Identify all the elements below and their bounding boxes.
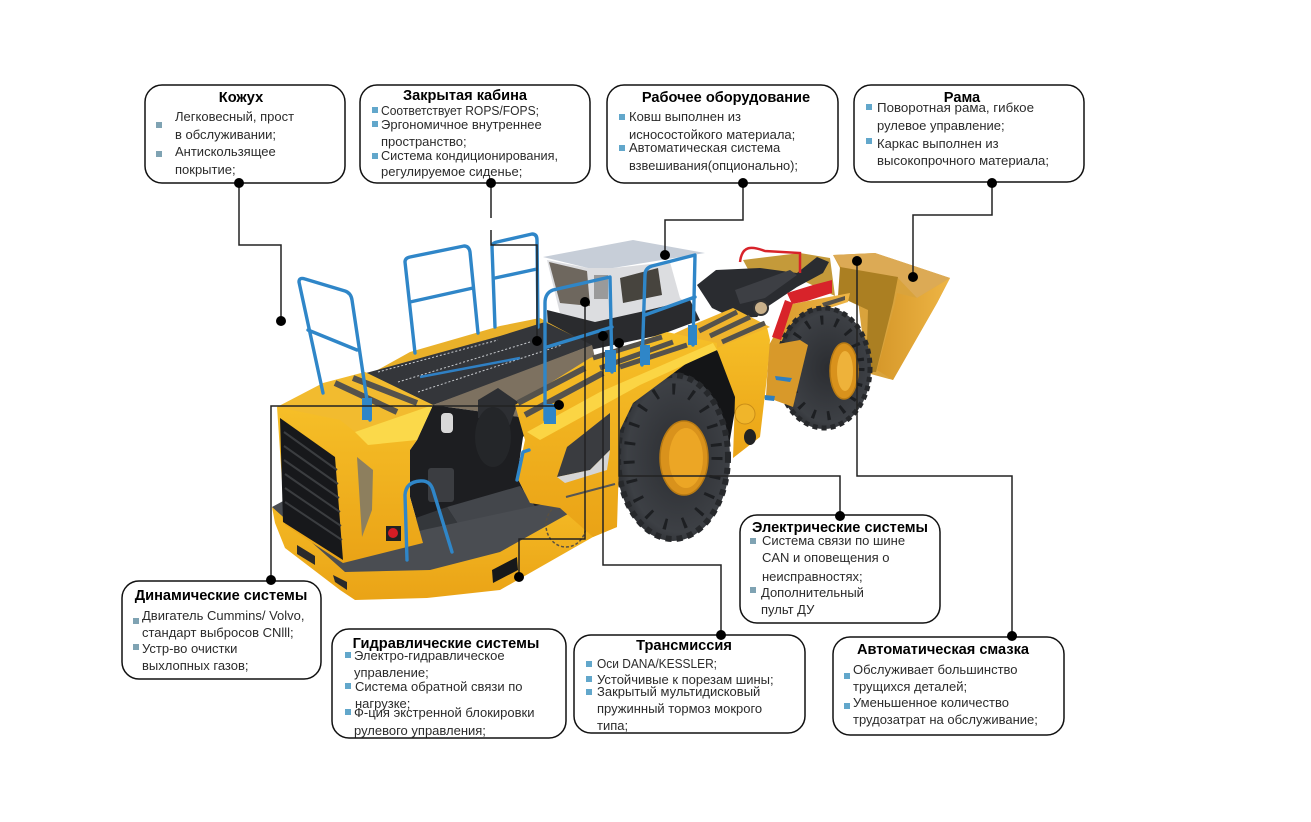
- panel: Рабочее оборудование: [607, 85, 838, 183]
- yellow lift arm back: [743, 253, 835, 296]
- dark rear deck: [366, 322, 596, 417]
- front frame lower panel: [764, 340, 808, 407]
- radiator grille: [280, 418, 343, 560]
- loader machine illustration: [272, 234, 950, 600]
- panel: Электрические системы: Электрические системы: [752, 520, 928, 536]
- cab: [543, 240, 705, 350]
- panel: Кожух: Антискользящее: [175, 144, 276, 159]
- panel: Динамические системы: Динамические системы: [135, 588, 307, 604]
- panel: Закрытая кабина: Закрытая кабина: [403, 88, 528, 104]
- panel: Трансмиссия: [574, 635, 805, 733]
- panel: Гидравлические системы: [332, 629, 566, 738]
- panel: Закрытая кабина: Система кондиционирования,: [381, 148, 558, 163]
- rear tyre: [616, 373, 730, 541]
- panel: Рама: Каркас выполнен из: [877, 136, 999, 151]
- yellow rear deck band: [365, 318, 590, 405]
- panel: Автоматическая смазка: Обслуживает большинство: [853, 662, 1018, 677]
- panel: Рама: Поворотная рама, гибкое: [877, 100, 1034, 115]
- panel: Динамические системы: выхлопных газов;: [142, 658, 248, 673]
- panel: Кожух: Легковесный, прост: [175, 109, 294, 124]
- panel: Динамические системы: Двигатель Cummins/ Volvo,: [142, 608, 304, 623]
- panel: Трансмиссия: Устойчивые к порезам шины;: [597, 672, 774, 687]
- side body panel: [515, 332, 717, 537]
- rear cowl: [277, 372, 433, 563]
- middle deck with stripes: [667, 308, 770, 348]
- panel: Рабочее оборудование: взвешивания(опционально);: [629, 158, 798, 173]
- engine bay: [410, 388, 553, 547]
- panel: Динамические системы: стандарт выбросов CNlll;: [142, 625, 294, 640]
- panel: Электрические системы: [740, 515, 940, 623]
- bucket: [833, 253, 950, 380]
- panel: Закрытая кабина: регулируемое сиденье;: [381, 164, 522, 179]
- panel: Трансмиссия: типа;: [597, 718, 628, 733]
- panel: Динамические системы: [122, 581, 321, 679]
- panel: Автоматическая смазка: трущихся деталей;: [853, 679, 967, 694]
- panel: Закрытая кабина: [360, 85, 590, 183]
- panel: Закрытая кабина: Соответствует ROPS/FOPS;: [381, 103, 539, 118]
- middle frame: [716, 327, 770, 458]
- panel: Кожух: в обслуживании;: [175, 127, 276, 142]
- panel: Гидравлические системы: управление;: [354, 665, 429, 680]
- skirt: [272, 480, 617, 600]
- panel: Автоматическая смазка: [833, 637, 1064, 735]
- side light: [357, 457, 373, 537]
- front tyre: [777, 307, 871, 429]
- panel: Электрические системы: пульт ДУ: [761, 602, 815, 617]
- panel: Электрические системы: Дополнительный: [761, 585, 864, 600]
- rail mounts: [362, 325, 697, 424]
- red stop button: [386, 526, 401, 541]
- panel: Динамические системы: Устр-во очистки: [142, 641, 237, 656]
- panel: Электрические системы: CAN и оповещения о: [762, 550, 890, 565]
- panel: Закрытая кабина: пространство;: [381, 134, 467, 149]
- blue guard rails: [299, 234, 695, 560]
- panel: Гидравлические системы: рулевого управления;: [354, 723, 486, 738]
- leader lines: [239, 183, 1012, 636]
- panel: Электрические системы: Система связи по шине: [762, 533, 905, 548]
- panel: Рама: Рама: [944, 90, 981, 106]
- articulation joint: [697, 257, 829, 318]
- panel: Гидравлические системы: Электро-гидравлическое: [354, 648, 505, 663]
- leader dots: [234, 178, 1017, 641]
- panel: Автоматическая смазка: Автоматическая смазка: [857, 642, 1030, 658]
- panel: Трансмиссия: Оси DANA/KESSLER;: [597, 656, 717, 671]
- panel: Гидравлические системы: Ф-ция экстренной блокировки: [354, 705, 535, 720]
- panel: Электрические системы: неисправностях;: [762, 569, 863, 584]
- panel: Гидравлические системы: нагрузке;: [355, 696, 410, 711]
- panel: Трансмиссия: Трансмиссия: [636, 638, 732, 654]
- panel: Кожух: [145, 85, 345, 183]
- panel: Рабочее оборудование: Рабочее оборудование: [642, 90, 810, 106]
- panel: Рабочее оборудование: Автоматическая система: [629, 140, 781, 155]
- fender shadow: [633, 350, 735, 457]
- panel: Рама: [854, 85, 1084, 182]
- panel: Автоматическая смазка: трудозатрат на обслуживание;: [853, 712, 1038, 727]
- red hydraulic parts: [740, 248, 832, 340]
- panel: Кожух: Кожух: [219, 90, 264, 106]
- panel: Рабочее оборудование: исносостойкого материала;: [629, 127, 795, 142]
- panel: Закрытая кабина: Эргономичное внутреннее: [381, 117, 542, 132]
- panel: Гидравлические системы: Гидравлические системы: [353, 636, 539, 652]
- panel: Кожух: покрытие;: [175, 162, 236, 177]
- panel: Рама: высокопрочного материала;: [877, 153, 1049, 168]
- panel: Гидравлические системы: Система обратной связи по: [355, 679, 522, 694]
- panel: Трансмиссия: Закрытый мультидисковый: [597, 684, 760, 699]
- panel: Рабочее оборудование: Ковш выполнен из: [629, 109, 741, 124]
- panel: Рама: рулевое управление;: [877, 118, 1005, 133]
- panel: Трансмиссия: пружинный тормоз мокрого: [597, 701, 762, 716]
- panel: Автоматическая смазка: Уменьшенное количество: [853, 695, 1009, 710]
- front frame: [766, 293, 850, 407]
